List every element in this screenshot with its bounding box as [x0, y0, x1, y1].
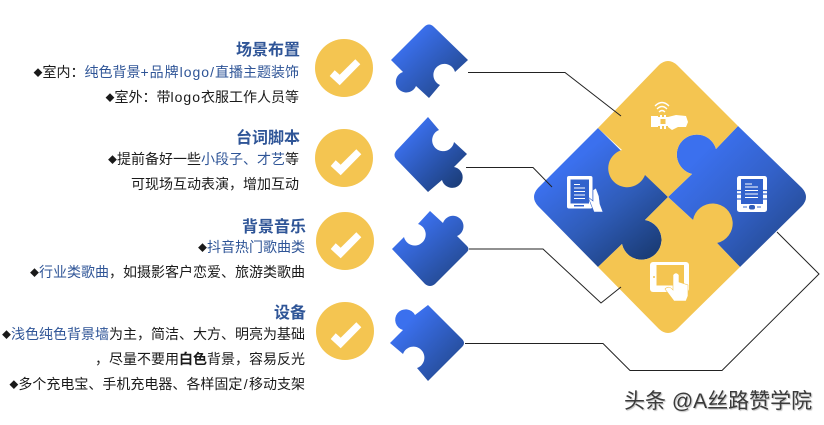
puzzle: right blue piece: [668, 126, 806, 267]
icon: puzzle piece 2: [394, 117, 467, 192]
icon: check badge 1: [315, 39, 373, 97]
text: 抖音热门歌曲类: ◆抖音热门歌曲类: [198, 239, 305, 255]
icon: smart watch: [651, 102, 688, 130]
text: 浅色纯色背景墙: ◆浅色纯色背景墙为主，简洁、大方、明亮为基础: [2, 326, 305, 342]
icon: touch tablet: [650, 262, 689, 301]
text: 室外: ◆室外：带logo衣服工作人员等: [106, 89, 299, 105]
heading: 场景布置: 场景布置: [236, 42, 300, 59]
puzzle: left blue piece: [534, 128, 668, 267]
puzzle: bottom yellow piece: [598, 197, 740, 333]
icon: check badge 3: [316, 212, 374, 270]
icon: check badge 4: [316, 302, 374, 360]
icon: puzzle piece 1: [391, 24, 468, 98]
watermark: 头条 @A丝路赞学院: [624, 390, 812, 413]
text: 行业类歌曲: ◆行业类歌曲，如摄影客户恋爱、旅游类歌曲: [30, 264, 305, 280]
icon: e-reader: [737, 176, 767, 212]
text: 尽量不要用白色背景: ，尽量不要用白色背景，容易反光: [95, 351, 305, 367]
icon: tablet with hand: [567, 176, 603, 212]
text: 提前备好: ◆提前备好一些小段子、才艺等: [108, 151, 299, 167]
puzzle diagram: [534, 61, 806, 333]
heading: 设备: 设备: [274, 305, 306, 322]
text: 可现场互动: 可现场互动表演，增加互动: [131, 176, 299, 192]
icon: check badge 2: [315, 129, 373, 187]
icon: puzzle piece 3: [392, 211, 468, 286]
puzzle: top yellow piece: [598, 61, 738, 197]
icon: puzzle piece 4: [390, 305, 464, 381]
connector lines: [465, 72, 819, 370]
heading: 背景音乐: 背景音乐: [242, 219, 306, 236]
text: 多个充电宝: ◆多个充电宝、手机充电器、各样固定/移动支架: [9, 376, 305, 392]
heading: 台词脚本: 台词脚本: [236, 130, 300, 147]
text: 室内: ◆室内：纯色背景+品牌logo/直播主题装饰: [33, 64, 299, 80]
